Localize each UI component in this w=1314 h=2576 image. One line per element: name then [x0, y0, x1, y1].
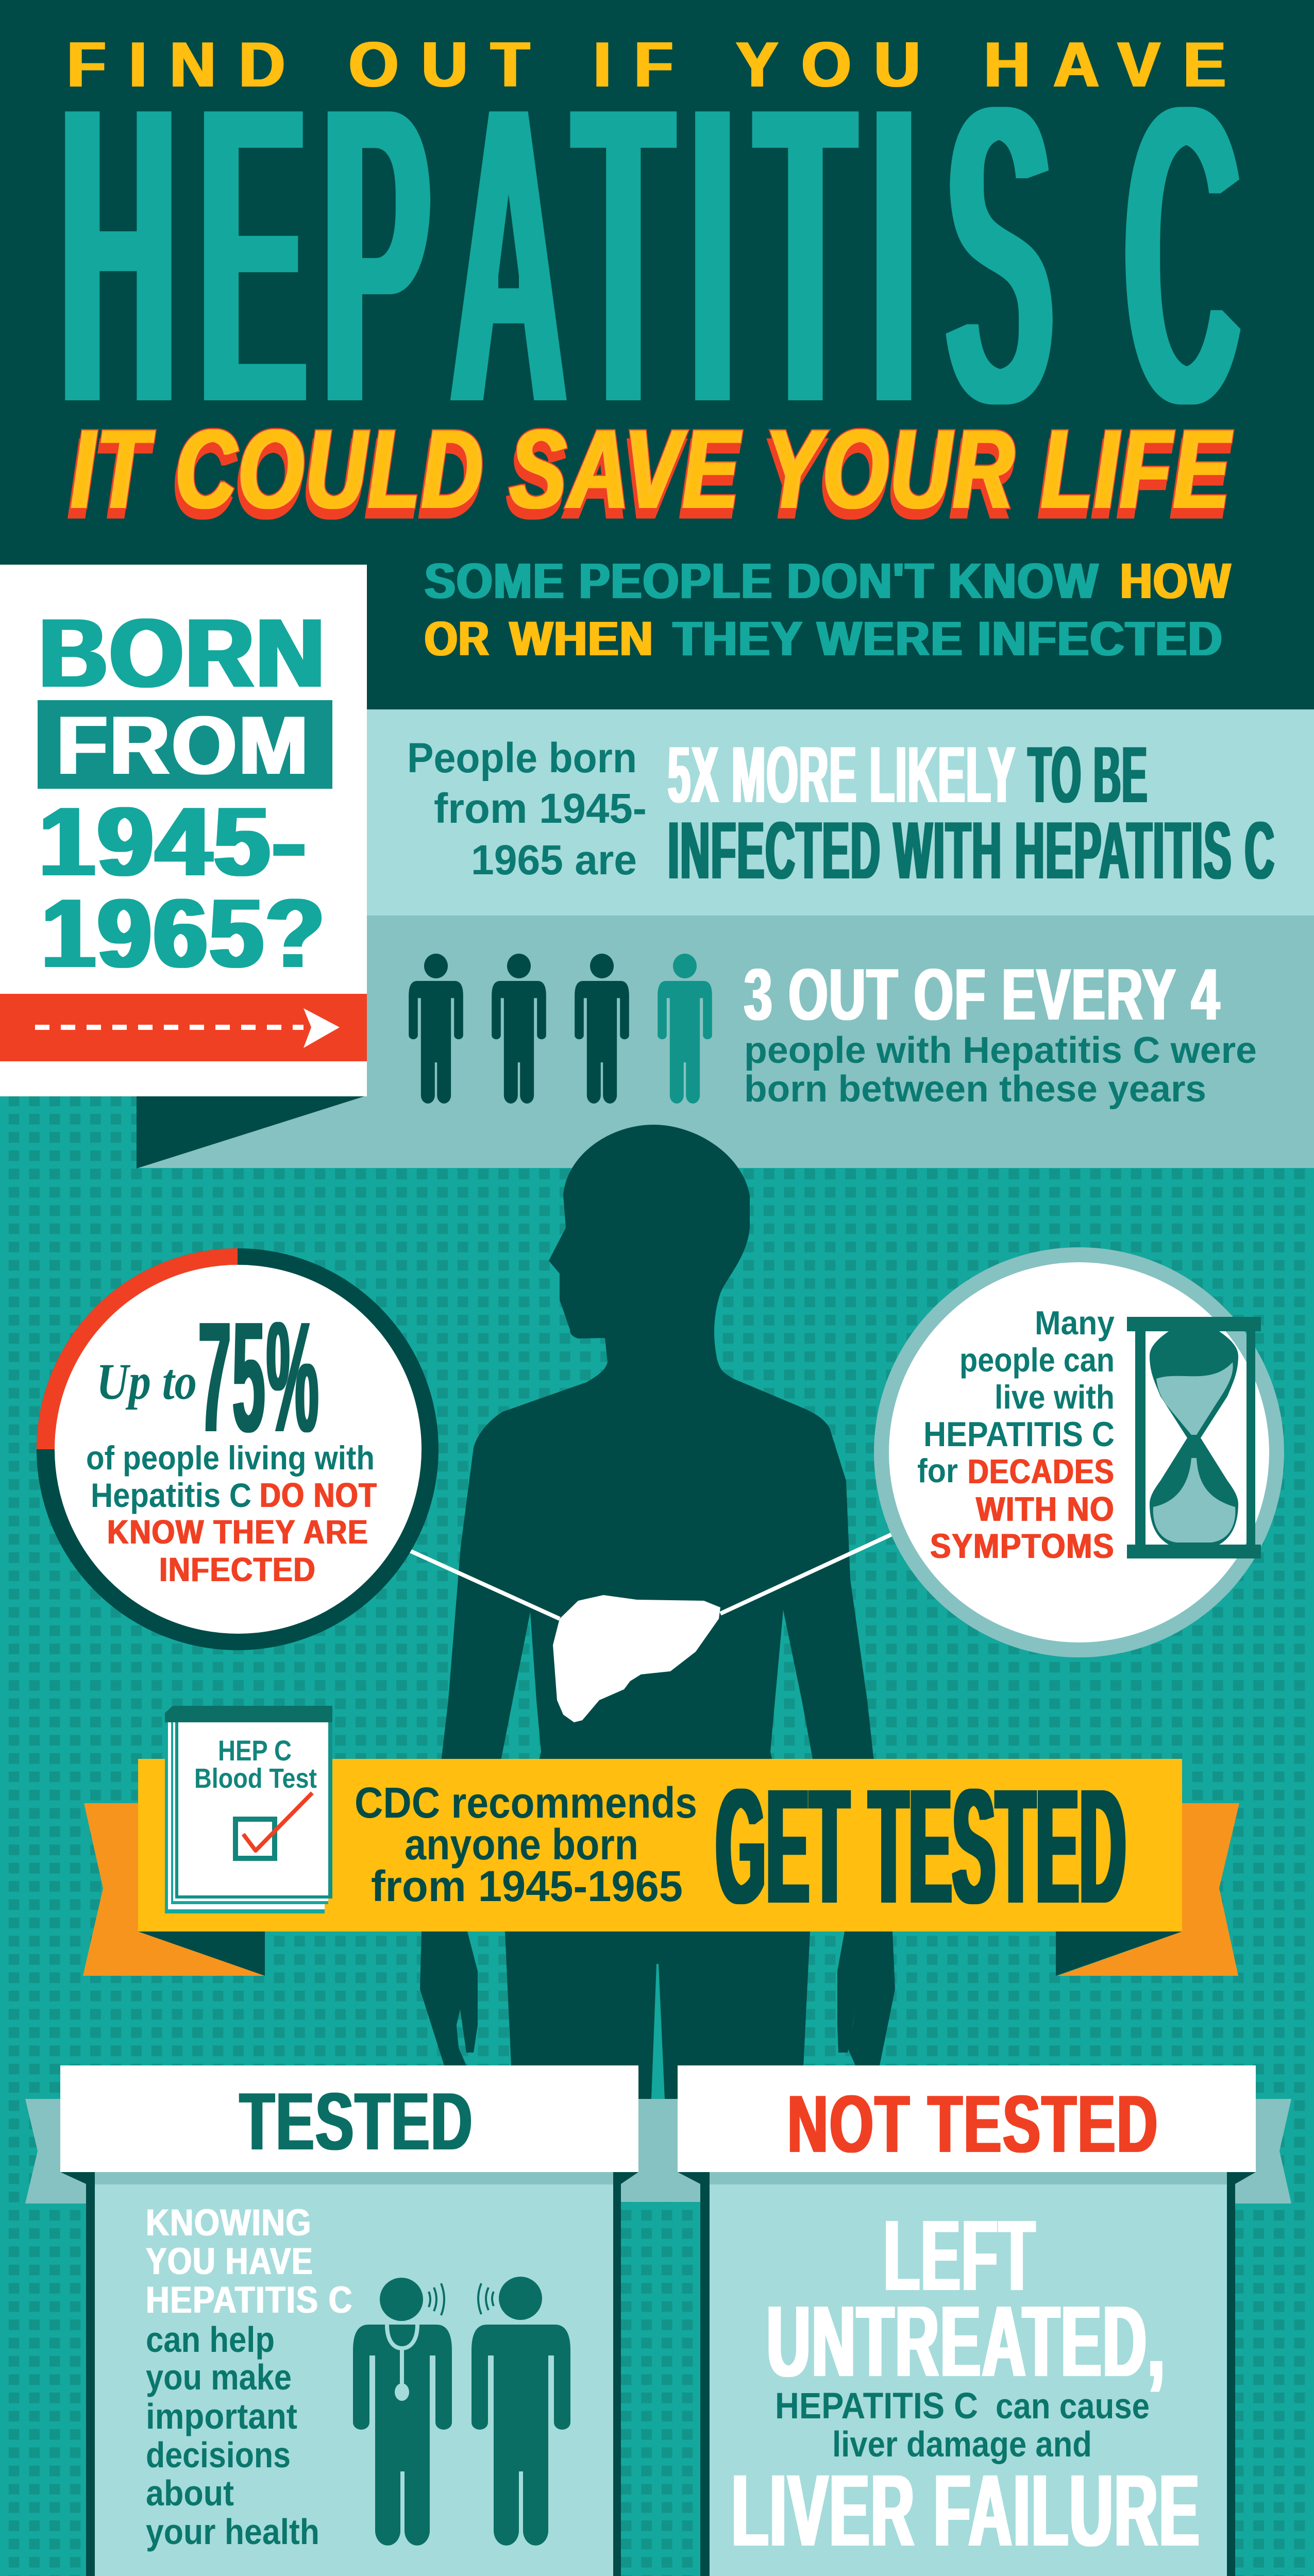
icon: liver: [553, 1595, 720, 1722]
text: decades: DECADES: [968, 1452, 1115, 1491]
heading: not tested: NOT TESTED: [787, 2079, 1159, 2170]
text: many people: [917, 1304, 1115, 1489]
heading: tested: [60, 2065, 638, 2172]
text: years: 1945-: [39, 787, 308, 896]
text: many people: live with: [995, 1378, 1115, 1416]
panel: 5x more likely: [367, 709, 1314, 916]
text: people born: [407, 735, 647, 884]
heading: tested: TESTED: [240, 2076, 474, 2167]
text: knowing: KNOWING: [146, 2202, 312, 2244]
panel: up to 75 percent: [37, 1248, 439, 1650]
ribbon behind cards: [25, 2099, 1291, 2204]
text: knowing: decisions: [146, 2435, 291, 2475]
header background: [0, 0, 1314, 709]
text: many people: for: [917, 1452, 958, 1489]
text: people with hepatitis c: [744, 1030, 1257, 1110]
text: cdc recommends: CDC recommends: [355, 1778, 697, 1827]
band: how or when: HOW: [1120, 553, 1232, 609]
band: how or when: SOME PEOPLE DON'T KNOW: [425, 553, 1099, 609]
text: do not know: [107, 1476, 377, 1588]
text: left untreated: [732, 2199, 1201, 2567]
icon: four people: [409, 954, 712, 1104]
text: of people living: [86, 1439, 375, 1514]
banner: get tested: [83, 1706, 1239, 1976]
text: hep c blood test: Blood Test: [194, 1763, 317, 1794]
text: of people living: Hepatitis C: [91, 1476, 251, 1514]
icon: hourglass: [1127, 1317, 1261, 1558]
text: of people living: of people living with: [86, 1439, 375, 1477]
panel: decades with no symptoms: [874, 1247, 1284, 1657]
text: knowing: important: [146, 2396, 297, 2436]
text: hep c blood test: [194, 1734, 317, 1794]
icon: test pad: [165, 1706, 332, 1913]
card: not tested: [678, 2065, 1256, 2576]
panel: born from 1945-1965: [0, 565, 367, 1096]
text: do not know: INFECTED: [159, 1550, 316, 1588]
main title: hepatitis c: HEPATITIS C: [60, 10, 1245, 499]
text: people born: People born: [407, 735, 637, 782]
text: knowing: your health: [146, 2512, 319, 2552]
text: decades: WITH NO: [976, 1490, 1115, 1529]
heading: not tested: [678, 2065, 1256, 2172]
callout lines: [396, 1528, 906, 1619]
icon: doctor and patient: [353, 2277, 570, 2546]
text: left untreated: LEFT: [884, 2199, 1036, 2312]
text: decades: SYMPTOMS: [930, 1527, 1115, 1566]
band: how or when: WHEN: [510, 612, 654, 666]
arrow: red bar: [0, 994, 367, 1061]
ribbon tails: [83, 1803, 1239, 1976]
text: up to: Up to: [96, 1353, 197, 1410]
stat: 5x more likely to be infected: TO BE: [1028, 730, 1148, 819]
label: from: FROM: [57, 699, 310, 792]
text: many people: people can: [959, 1341, 1115, 1379]
text: hep c blood test: HEP C: [218, 1734, 292, 1767]
text: do not know: DO NOT: [260, 1476, 377, 1515]
text: born: BORN: [39, 599, 327, 708]
text: people with hepatitis c: born between these years: [744, 1069, 1206, 1110]
title: [60, 10, 1245, 532]
band: how or when: THEY WERE INFECTED: [673, 612, 1223, 666]
band: how or when: OR: [425, 612, 490, 666]
text: do not know: KNOW THEY ARE: [107, 1513, 368, 1551]
panel: up to 75 percent: 75%: [198, 1289, 320, 1465]
patterned teal background: [0, 1096, 1314, 2576]
text: cdc recommends: [355, 1778, 697, 1910]
text: knowing: HEPATITIS C: [146, 2279, 353, 2321]
card: tested: [60, 2065, 638, 2576]
band: how or when: [425, 553, 1232, 666]
eyebrow: find out: FIND OUT IF YOU HAVE: [67, 29, 1227, 100]
text: left untreated: can cause: [996, 2386, 1150, 2426]
text: knowing: YOU HAVE: [146, 2241, 313, 2282]
text: knowing: [146, 2202, 353, 2552]
panel: 3 out of 4: [137, 916, 1314, 1168]
text: left untreated: liver damage and: [832, 2424, 1092, 2464]
text: cdc recommends: from 1945-1965: [371, 1862, 683, 1910]
text: years: [39, 787, 327, 988]
text: knowing: you make: [146, 2357, 292, 2397]
text: years: 1965?: [42, 879, 327, 988]
text: many people: Many: [1035, 1304, 1115, 1342]
text: cdc recommends: anyone born: [405, 1820, 638, 1869]
text: knowing: can help: [146, 2319, 275, 2360]
text: knowing: about: [146, 2473, 234, 2513]
body silhouette: [420, 1125, 895, 2099]
text: decades: [930, 1452, 1115, 1566]
text: many people: HEPATITIS C: [923, 1415, 1115, 1454]
text: left untreated: HEPATITIS C: [775, 2386, 978, 2427]
stat: 5x more likely to be infected: [668, 730, 1275, 896]
icon: checkbox: [235, 1793, 312, 1858]
text: people with hepatitis c: people with Hepatitis C were: [744, 1030, 1257, 1071]
text: people born: from 1945-: [434, 785, 647, 832]
text: people born: 1965 are: [471, 837, 637, 884]
ribbon fold: [137, 1096, 364, 1168]
